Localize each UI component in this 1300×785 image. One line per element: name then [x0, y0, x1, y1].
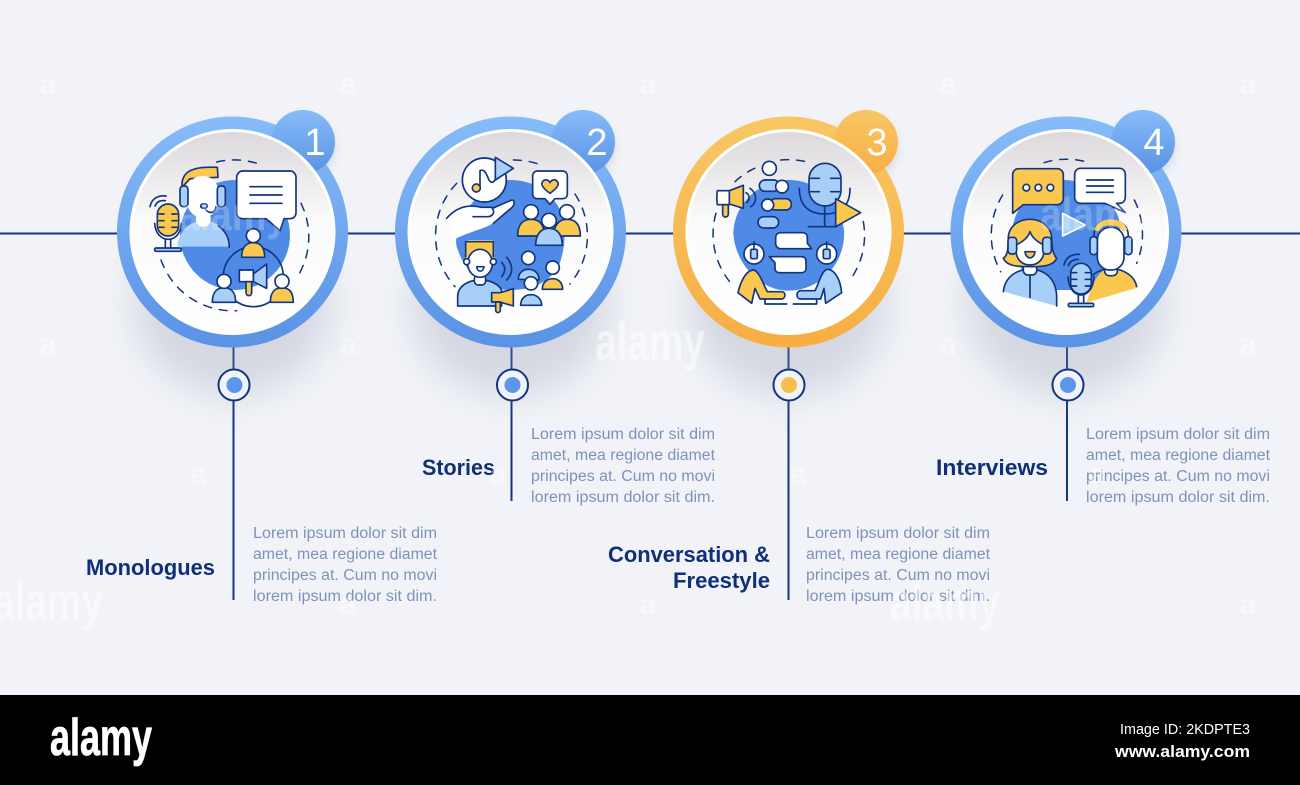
- panel: Stories: [395, 110, 716, 506]
- text block 4: amet, mea regione diamet: [1086, 447, 1271, 464]
- watermarks: alamy: [890, 572, 1000, 632]
- numbered ring 2: 2: [586, 122, 608, 164]
- panel: Interviews: [936, 110, 1271, 506]
- numbered ring 3: [673, 110, 904, 348]
- numbered ring 1: [117, 110, 348, 348]
- icon: interview with two people: [991, 159, 1142, 307]
- watermarks: a: [1240, 328, 1257, 361]
- footer logo: alamy: [50, 709, 152, 767]
- watermarks: alamy: [595, 312, 705, 372]
- watermarks: a: [1240, 588, 1257, 621]
- text block 2: lorem ipsum dolor sit dim.: [531, 489, 715, 506]
- numbered ring 4: 4: [1143, 122, 1165, 164]
- watermarks: alamy: [178, 188, 288, 240]
- heading: Stories: Stories: [422, 455, 495, 480]
- panel: Conversation and Freestyle: [608, 110, 991, 605]
- numbered ring 2: [395, 110, 626, 348]
- text block 3: amet, mea regione diamet: [806, 546, 991, 563]
- heading: Conversation & Freestyle: Freestyle: [673, 568, 770, 593]
- heading: Interviews: Interviews: [936, 455, 1048, 480]
- watermarks: [0, 68, 1257, 632]
- text block 4: [1086, 426, 1271, 506]
- watermarks: a: [940, 328, 957, 361]
- heading: Conversation & Freestyle: [608, 542, 770, 593]
- text block 4: Lorem ipsum dolor sit dim: [1086, 426, 1270, 443]
- text block 2: Lorem ipsum dolor sit dim: [531, 426, 715, 443]
- text block 1: amet, mea regione diamet: [253, 546, 438, 563]
- image id: Image ID: 2KDPTE3: [1120, 721, 1250, 738]
- watermarks: a: [40, 328, 57, 361]
- numbered ring 4: [950, 110, 1182, 348]
- watermarks: alamy: [1040, 188, 1150, 240]
- watermarks: a: [640, 588, 657, 621]
- dot marker 2: [497, 370, 528, 400]
- text block 3: principes at. Cum no movi: [806, 567, 990, 584]
- watermarks: a: [1090, 458, 1107, 491]
- watermarks: a: [1240, 68, 1257, 101]
- text block 1: Lorem ipsum dolor sit dim: [253, 525, 437, 542]
- heading: Conversation & Freestyle: Conversation &: [608, 542, 770, 567]
- footer bar: [0, 695, 1300, 785]
- dot marker 3: [774, 370, 804, 400]
- timeline axis: [0, 234, 1300, 600]
- text block 1: principes at. Cum no movi: [253, 567, 437, 584]
- heading: Monologues: Monologues: [86, 555, 215, 580]
- website: www.alamy.com: [1114, 742, 1250, 761]
- text block 1: [253, 525, 438, 605]
- text block 1: lorem ipsum dolor sit dim.: [253, 588, 437, 605]
- icon: stories with music, speaker and listeners: [436, 157, 587, 312]
- text block 3: [806, 525, 991, 605]
- watermarks: a: [40, 68, 57, 101]
- text block 2: [531, 426, 716, 506]
- icon: host with microphone and audience: [150, 160, 309, 311]
- watermarks: a: [340, 328, 357, 361]
- text block 4: principes at. Cum no movi: [1086, 468, 1270, 485]
- watermarks: a: [940, 68, 957, 101]
- watermarks: a: [340, 588, 357, 621]
- text block 2: amet, mea regione diamet: [531, 447, 716, 464]
- text block 3: lorem ipsum dolor sit dim.: [806, 588, 990, 605]
- dot marker 4: [1052, 370, 1084, 400]
- panel: Monologues: [86, 110, 438, 605]
- watermarks: a: [490, 458, 507, 491]
- watermarks: a: [340, 68, 357, 101]
- numbered ring 1: 1: [304, 122, 326, 164]
- watermarks: a: [640, 68, 657, 101]
- numbered ring 3: 3: [866, 122, 888, 164]
- text block 3: Lorem ipsum dolor sit dim: [806, 525, 990, 542]
- watermarks: a: [190, 458, 207, 491]
- text block 2: principes at. Cum no movi: [531, 468, 715, 485]
- text block 4: lorem ipsum dolor sit dim.: [1086, 489, 1270, 506]
- dot marker 1: [218, 370, 250, 400]
- icon: conversation with microphone and speakers: [713, 160, 865, 304]
- watermarks: a: [790, 458, 807, 491]
